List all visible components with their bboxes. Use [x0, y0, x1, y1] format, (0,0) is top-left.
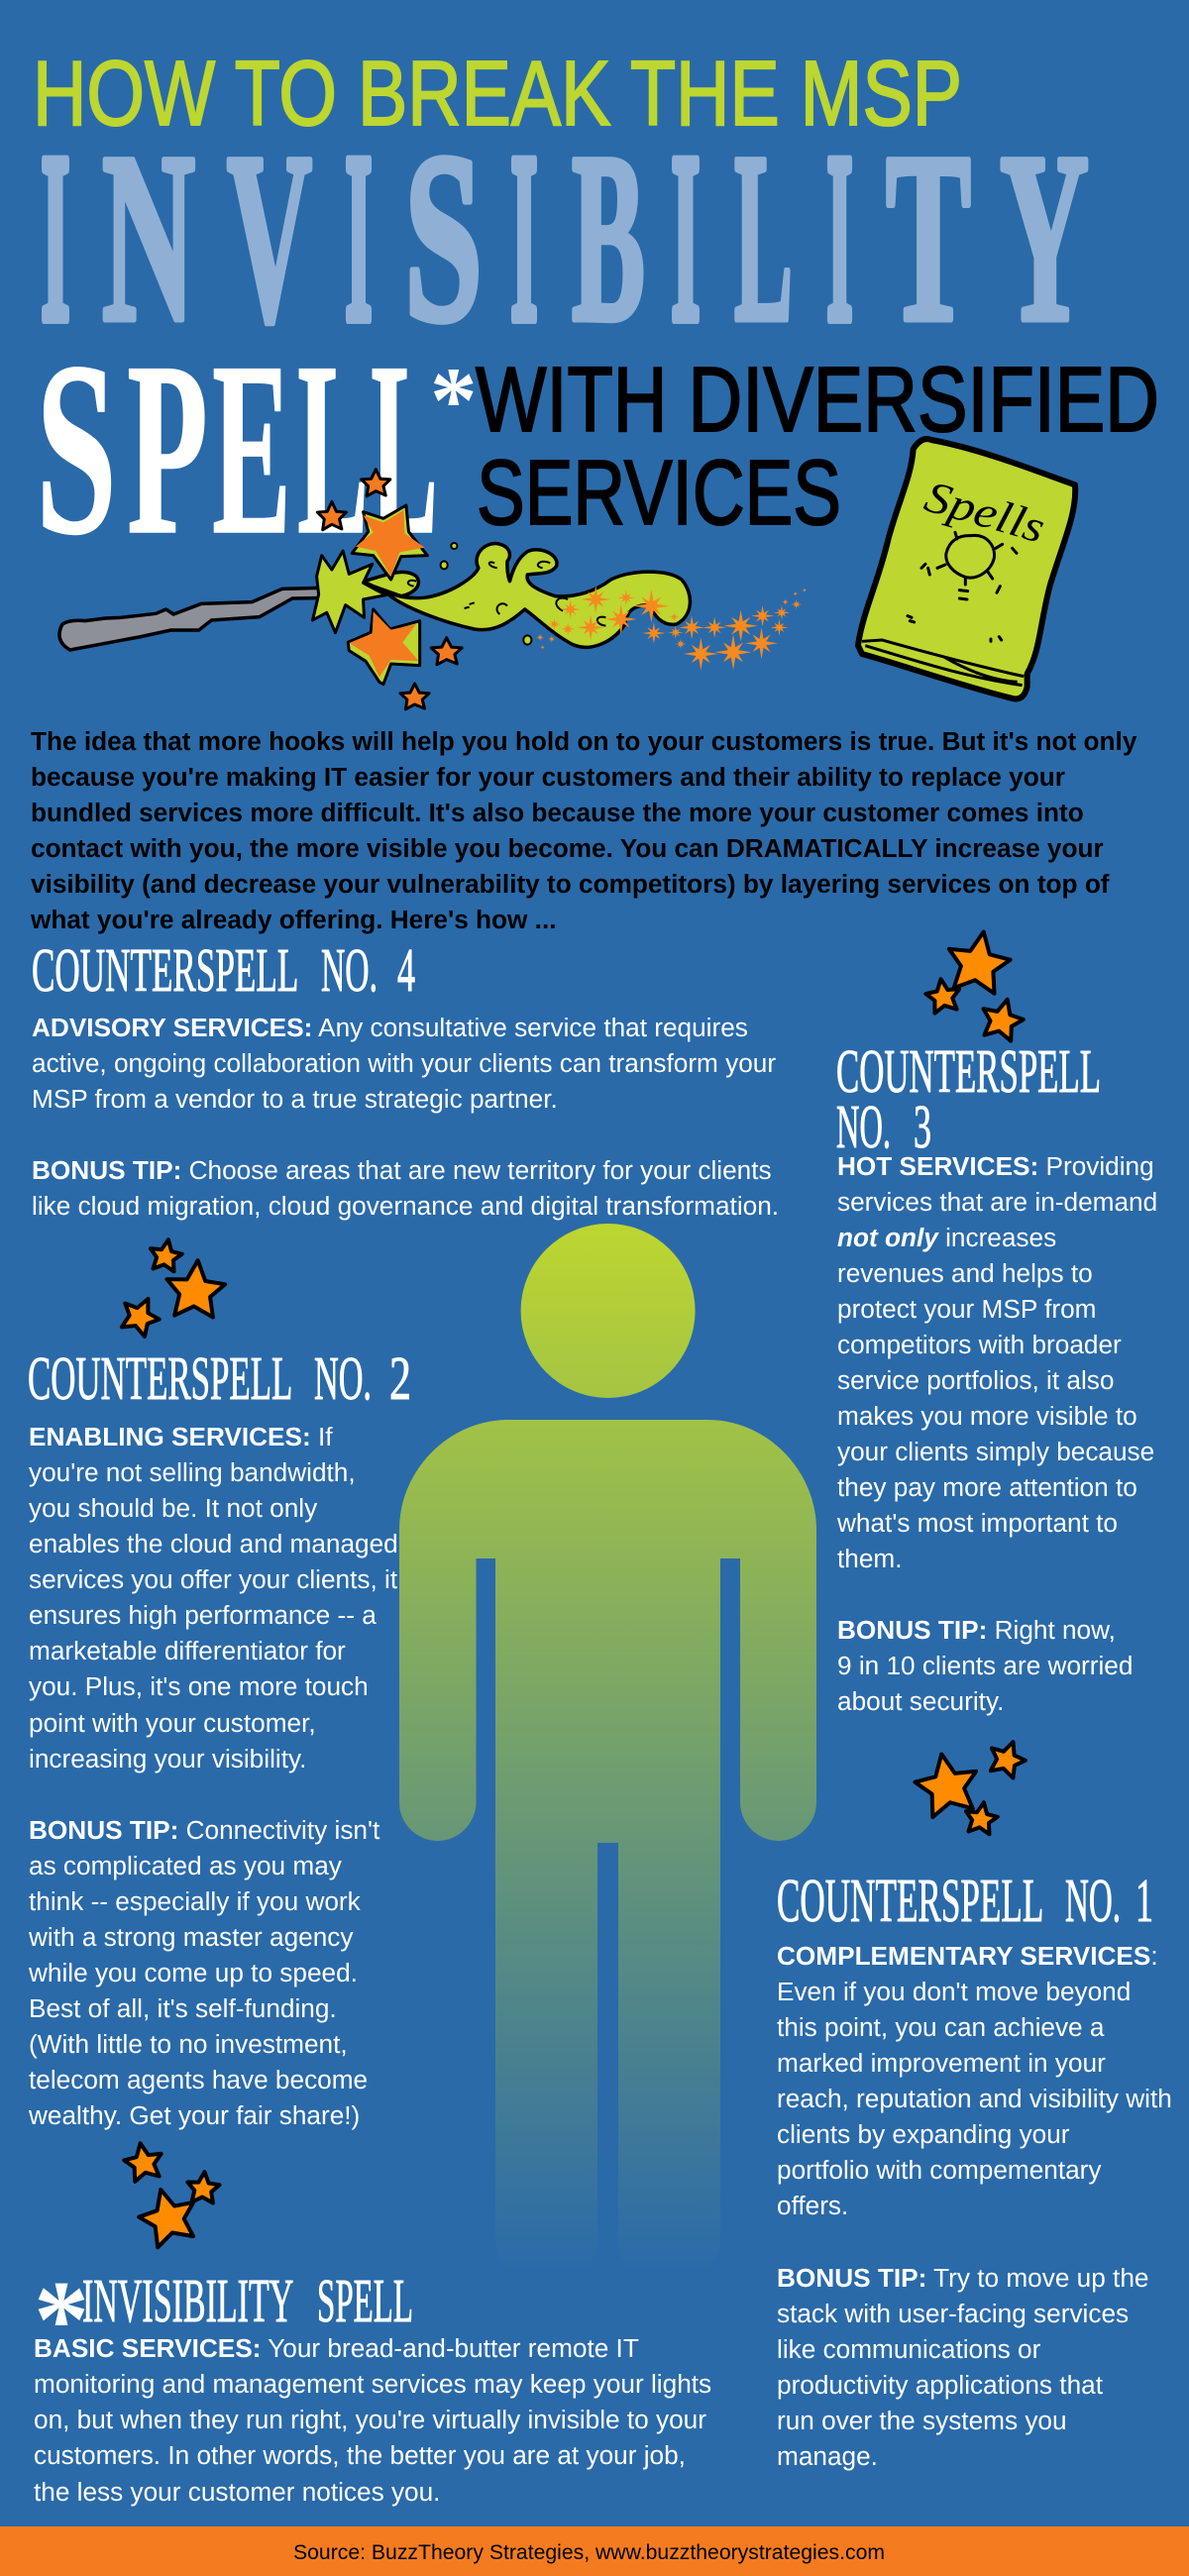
- text: advisory services: MSP from a vendor to a true strategic partner.: [32, 1084, 558, 1114]
- intro text: what you're already offering. Here's how ...: [30, 905, 557, 934]
- text: complementary services: marked improvement in your: [777, 2048, 1106, 2078]
- icon: big star bottom: [348, 609, 420, 685]
- panel: counterspell no. 4: [32, 937, 779, 1221]
- text: hot services: revenues and helps to: [837, 1258, 1093, 1288]
- title: how to break the msp: HOW TO BREAK THE MSP: [33, 42, 962, 145]
- subtitle: with diversified services: SERVICES: [477, 441, 841, 544]
- text: basic services: on, but when they run right, you're virtually invisible to your: [34, 2405, 706, 2434]
- text: complementary services: reach, reputation and visibility with: [777, 2084, 1172, 2113]
- icon: big star top: [352, 505, 427, 580]
- heading: invisibility spell: SPELL: [317, 2268, 413, 2335]
- icon: small stars: [317, 470, 462, 709]
- text: hot services: HOT SERVICES: Providing: [837, 1151, 1154, 1181]
- text: enabling services: as complicated as you may: [29, 1851, 343, 1880]
- panel: counterspell no. 3: [836, 1038, 1157, 1716]
- text: complementary services: productivity applications that: [777, 2370, 1104, 2400]
- text: basic services: customers. In other words, the better you are at your job,: [34, 2440, 686, 2470]
- title: invisibility: T: [886, 103, 971, 372]
- icon: starburst: [313, 551, 385, 633]
- intro text: because you're making IT easier for your customers and their ability to replace your: [31, 762, 1065, 792]
- text: complementary services: portfolio with compementary: [777, 2155, 1102, 2185]
- text: enabling services: ensures high performance -- a: [29, 1600, 377, 1630]
- text: enabling services: while you come up to speed.: [28, 1958, 358, 1987]
- title: spell with asterisk: E: [212, 311, 291, 587]
- panel: counterspell no. 2: [28, 1345, 411, 2130]
- text: advisory services: like cloud migration, cloud governance and digital transformation.: [32, 1191, 779, 1221]
- text: complementary services: BONUS TIP: Try to move up the: [777, 2263, 1148, 2293]
- icon: person head: [521, 1224, 696, 1398]
- icon: spell book: [858, 439, 1075, 698]
- text: enabling services: ENABLING SERVICES: If: [29, 1422, 333, 1451]
- text: enabling services: point with your customer,: [29, 1708, 316, 1738]
- text: hot services: your clients simply because: [837, 1437, 1154, 1466]
- title: spell with asterisk: [36, 311, 478, 587]
- text: basic services: BASIC SERVICES: Your bread-and-butter remote IT: [34, 2333, 639, 2363]
- title: invisibility: L: [734, 103, 793, 372]
- icon: sun doodle: [908, 532, 1017, 641]
- heading: counterspell no. 2: COUNTERSPELL: [28, 1345, 291, 1413]
- title: spell with asterisk: P: [127, 311, 208, 587]
- title: spell with asterisk: L: [297, 311, 369, 587]
- text: enabling services: marketable differentiator for: [29, 1636, 346, 1665]
- intro text: visibility (and decrease your vulnerability to competitors) by layering services on top of: [31, 869, 1110, 899]
- text: enabling services: with a strong master agency: [28, 1922, 354, 1952]
- heading: counterspell no. 4: NO.: [321, 937, 378, 1005]
- text: enabling services: [28, 1422, 398, 2130]
- icon: person body: [399, 1420, 816, 2287]
- intro text: bundled services more difficult. It's also because the more your customer comes into: [31, 798, 1084, 827]
- text: advisory services: active, ongoing collaboration with your clients can transform your: [32, 1048, 776, 1078]
- text: advisory services: ADVISORY SERVICES: Any consultative service that requires: [32, 1013, 748, 1042]
- text: hot services: about security.: [837, 1686, 1004, 1716]
- heading: counterspell no. 3: [836, 1038, 1101, 1161]
- icon: book pages: [862, 640, 1024, 686]
- text: basic services: monitoring and management services may keep your lights: [34, 2369, 711, 2399]
- heading: counterspell no. 1: 1: [1135, 1868, 1153, 1935]
- icon: stars above counterspell no. 1: [911, 1736, 1029, 1836]
- text: hot services: what's most important to: [836, 1508, 1118, 1538]
- heading: invisibility spell: *: [34, 2259, 89, 2382]
- icon: swoosh curls: [408, 562, 605, 626]
- text: complementary services: stack with user-facing services: [777, 2299, 1129, 2328]
- panel: counterspell no. 1: [777, 1868, 1172, 2471]
- text: enabling services: you should be. It not only: [29, 1493, 318, 1523]
- title: invisibility: B: [572, 103, 645, 372]
- text: advisory services: BONUS TIP: Choose areas that are new territory for your clients: [32, 1155, 772, 1185]
- icon: book cover: [858, 439, 1075, 698]
- heading: counterspell no. 3: 3: [914, 1094, 931, 1161]
- title: spell with asterisk: *: [430, 348, 478, 453]
- footer bar: [0, 2526, 1189, 2576]
- title: invisibility: S: [404, 103, 483, 372]
- text: hot services: BONUS TIP: Right now,: [837, 1615, 1116, 1645]
- text: hot services: they pay more attention to: [837, 1472, 1137, 1502]
- title: invisibility: I: [826, 103, 853, 372]
- text: enabling services: you. Plus, it's one more touch: [29, 1671, 369, 1701]
- text: hot services: service portfolios, it also: [837, 1365, 1114, 1395]
- heading: counterspell no. 2: 2: [389, 1345, 411, 1413]
- text: enabling services: enables the cloud and managed: [29, 1529, 398, 1558]
- text: hot services: protect your MSP from: [837, 1294, 1096, 1324]
- icon: green swoosh: [364, 544, 690, 647]
- text: advisory services: [32, 1013, 779, 1221]
- heading: counterspell no. 4: 4: [397, 937, 415, 1005]
- heading: counterspell no. 1: NO.: [1065, 1868, 1121, 1935]
- book title: Spells: [919, 472, 1050, 553]
- text: enabling services: services you offer your clients, it: [29, 1564, 398, 1594]
- text: hot services: [836, 1151, 1157, 1716]
- text: basic services: [34, 2333, 711, 2507]
- text: hot services: services that are in-demand: [837, 1187, 1157, 1217]
- title: spell with asterisk: S: [36, 311, 117, 587]
- heading: invisibility spell: [34, 2259, 413, 2382]
- icon: stars above invisibility spell: [122, 2140, 221, 2250]
- text: enabling services: increasing your visibility.: [29, 1744, 306, 1773]
- text: complementary services: clients by expanding your: [777, 2119, 1070, 2149]
- icon: magic wand with stars and sparkles: [59, 470, 807, 709]
- text: hot services: makes you more visible to: [837, 1401, 1137, 1431]
- title: invisibility: Y: [1000, 103, 1089, 372]
- text: complementary services: COMPLEMENTARY SERVICES:: [777, 1941, 1158, 1971]
- text: complementary services: offers.: [777, 2191, 848, 2220]
- source line: Source: BuzzTheory Strategies, www.buzztheorystrategies.com: [293, 2541, 885, 2564]
- heading: invisibility spell: INVISIBILITY: [82, 2268, 293, 2335]
- text: basic services: the less your customer notices you.: [34, 2477, 440, 2507]
- title: invisibility: N: [102, 103, 195, 372]
- text: enabling services: Best of all, it's self-funding.: [29, 1993, 337, 2023]
- title: invisibility: I: [671, 103, 701, 372]
- text: hot services: them.: [837, 1544, 902, 1573]
- title: invisibility: I: [41, 103, 70, 372]
- text: enabling services: (With little to no investment,: [29, 2029, 348, 2059]
- text: enabling services: BONUS TIP: Connectivity isn't: [29, 1815, 380, 1845]
- panel: invisibility spell definition: [34, 2259, 711, 2507]
- text: enabling services: wealthy. Get your fair share!): [28, 2100, 360, 2130]
- icon: sparkles: [536, 586, 807, 671]
- intro text: [30, 726, 1137, 934]
- heading: counterspell no. 2: NO.: [314, 1345, 372, 1413]
- intro text: The idea that more hooks will help you hold on to your customers is true. But it's not only: [31, 726, 1137, 756]
- text: enabling services: think -- especially if you work: [29, 1886, 362, 1916]
- text: enabling services: telecom agents have become: [29, 2065, 368, 2094]
- icon: droplets: [441, 543, 531, 645]
- text: hot services: 9 in 10 clients are worried: [837, 1651, 1133, 1680]
- text: hot services: not only increases: [837, 1223, 1056, 1252]
- title: spell with asterisk: L: [371, 311, 438, 587]
- text: enabling services: you're not selling bandwidth,: [29, 1457, 356, 1487]
- title: invisibility: I: [510, 103, 538, 372]
- text: complementary services: this point, you can achieve a: [777, 2012, 1105, 2042]
- text: complementary services: [777, 1941, 1172, 2471]
- icon: wand stick: [59, 588, 330, 650]
- intro text: contact with you, the more visible you become. You can DRAMATICALLY increase your: [31, 833, 1104, 863]
- subtitle: with diversified services: [476, 348, 1159, 544]
- title: invisibility: V: [227, 103, 312, 372]
- text: complementary services: like communications or: [777, 2334, 1041, 2364]
- icon: stars above counterspell no. 3: [924, 926, 1027, 1043]
- text: complementary services: Even if you don't move beyond: [777, 1977, 1131, 2006]
- icon: person silhouette: [399, 1224, 816, 2287]
- text: complementary services: manage.: [777, 2441, 878, 2471]
- text: complementary services: run over the systems you: [777, 2406, 1067, 2435]
- title: invisibility: I: [345, 103, 373, 372]
- heading: counterspell no. 3: NO.: [836, 1094, 891, 1161]
- icon: stars above counterspell no. 2: [116, 1236, 227, 1340]
- text: hot services: competitors with broader: [837, 1330, 1122, 1359]
- heading: counterspell no. 4: COUNTERSPELL: [32, 937, 297, 1005]
